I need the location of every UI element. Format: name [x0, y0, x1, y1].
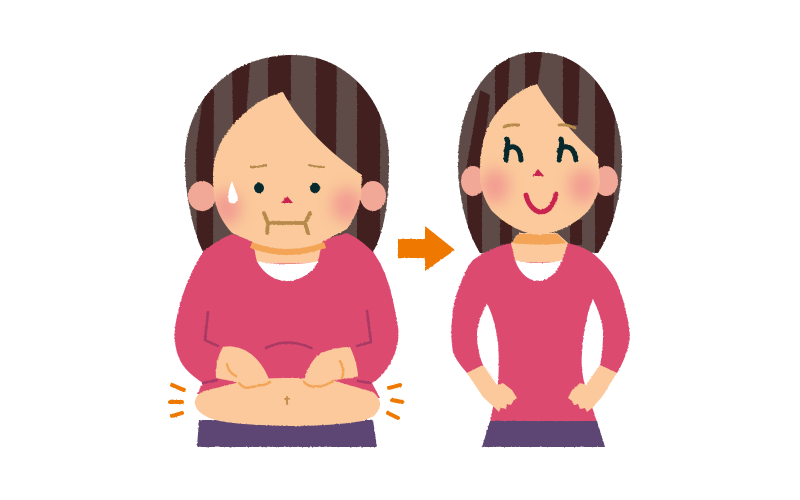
- smiling eyes: [506, 139, 576, 160]
- face: after: [480, 84, 600, 235]
- eyebrows: before: [251, 165, 324, 167]
- face: before: [211, 92, 362, 252]
- motion lines: right: [388, 385, 402, 418]
- smile: [526, 194, 556, 212]
- hair: before: [185, 50, 389, 255]
- puffed mouth: before: [264, 213, 310, 233]
- nose: before: [281, 196, 293, 203]
- neck crease: before: [251, 245, 325, 252]
- motion lines: left: [170, 385, 184, 416]
- eyebrows: after: [504, 125, 575, 128]
- skirt: after: [482, 421, 605, 447]
- neck and collar: after: [511, 233, 568, 281]
- hair: after: [458, 45, 622, 255]
- nose: after: [532, 169, 544, 176]
- clothing fold lines: [203, 311, 371, 383]
- sweater: before: [175, 233, 399, 398]
- hands pinching belly: [216, 346, 358, 389]
- arm gap: left: [477, 304, 499, 383]
- belly: [195, 378, 380, 426]
- ears: before: [188, 181, 386, 211]
- figure: before, overweight woman: [170, 45, 630, 447]
- sweat drop: [228, 181, 238, 203]
- eyes: before: [254, 183, 320, 193]
- skirt: before: [197, 420, 377, 447]
- neck and collar: before: [252, 238, 323, 281]
- illustration: before and after weight loss: [168, 52, 630, 448]
- sweater: after: [451, 243, 630, 422]
- arms and hands: after: [467, 365, 617, 412]
- arrow: [398, 226, 455, 271]
- arm gap: right: [582, 299, 603, 386]
- navel: [285, 397, 289, 404]
- figure: after, slim woman: [451, 45, 630, 447]
- ears: after: [461, 166, 618, 196]
